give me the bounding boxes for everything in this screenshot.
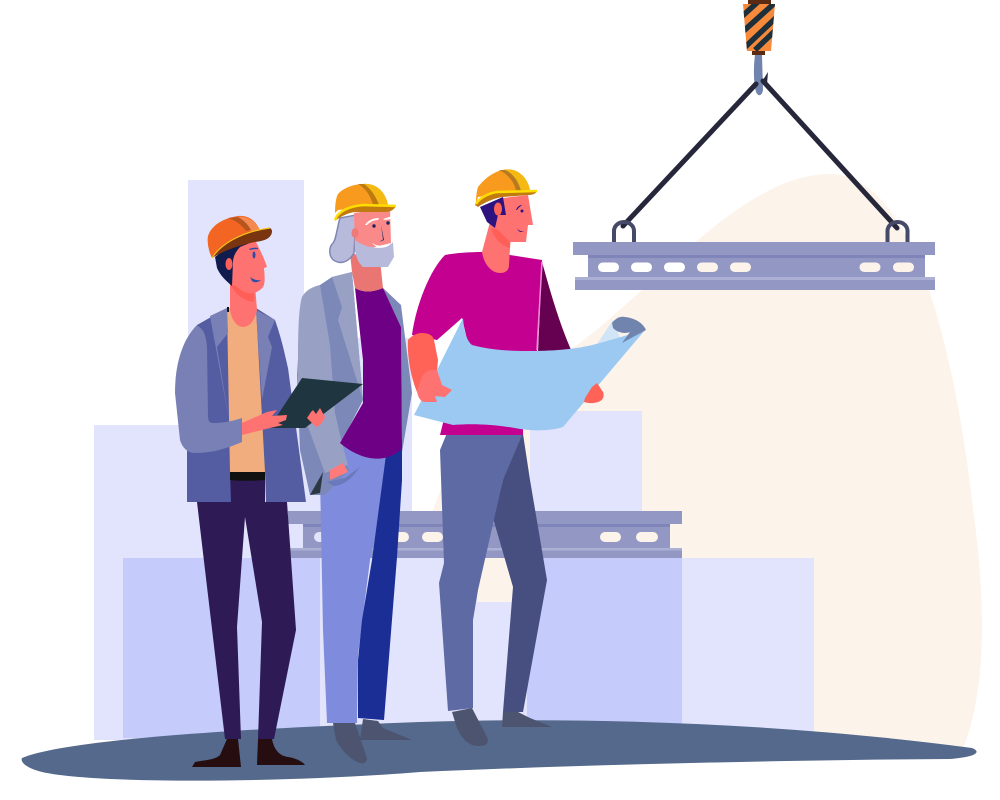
hoisted steel beam bbox=[573, 242, 935, 290]
crane hook and block bbox=[743, 0, 775, 96]
shirt bbox=[412, 252, 542, 352]
ear bbox=[226, 258, 232, 270]
hard hat bbox=[335, 184, 396, 221]
belt bbox=[230, 472, 265, 481]
background: darker building blocks bbox=[123, 558, 682, 740]
jacket bbox=[187, 308, 306, 502]
hands on clipboard bbox=[242, 408, 325, 435]
shoes bbox=[192, 739, 305, 767]
ground bbox=[22, 720, 977, 781]
pocket and hand bbox=[330, 463, 348, 480]
shirt back panel bbox=[538, 262, 572, 352]
shoes bbox=[452, 708, 552, 746]
paper curl bbox=[612, 317, 646, 343]
brows and smile bbox=[365, 216, 392, 247]
curl underside bbox=[595, 320, 622, 347]
hard hat bbox=[208, 216, 272, 258]
clipboard held by first man bbox=[242, 378, 363, 435]
beard bbox=[355, 240, 394, 267]
face bbox=[227, 240, 267, 293]
hard hat bbox=[475, 169, 537, 207]
trousers dark bbox=[358, 440, 402, 720]
face bbox=[354, 208, 391, 252]
shoes bbox=[333, 719, 412, 763]
lapel bbox=[332, 272, 363, 400]
eye, brow, mouth bbox=[249, 248, 261, 282]
background beam bbox=[288, 511, 682, 558]
ear bbox=[352, 228, 358, 238]
neck bbox=[230, 280, 257, 327]
shirt bbox=[227, 308, 265, 472]
legs bbox=[197, 470, 296, 739]
background: pale buildings bbox=[94, 180, 814, 740]
sleeve bbox=[175, 325, 242, 453]
trouser far leg bbox=[493, 434, 547, 712]
eyes and nose bbox=[372, 221, 390, 242]
face bbox=[495, 195, 533, 242]
ear bbox=[494, 202, 502, 216]
shirt lower bbox=[440, 415, 523, 435]
left hand bbox=[417, 370, 452, 402]
jacket right strip bbox=[383, 288, 412, 452]
shirt bbox=[340, 288, 402, 459]
crane slings bbox=[623, 81, 897, 228]
forearm bbox=[408, 333, 438, 392]
trousers light bbox=[320, 440, 388, 723]
eye, brow, mouth bbox=[516, 205, 524, 232]
collar bbox=[227, 307, 256, 312]
person: man with clipboard bbox=[175, 216, 306, 767]
neck bbox=[350, 253, 383, 292]
person: older man with beard bbox=[297, 184, 412, 763]
background: cream blob bbox=[411, 174, 982, 752]
lapels bbox=[210, 308, 275, 420]
right hand bbox=[584, 383, 604, 403]
hair bbox=[215, 240, 257, 286]
beam shackles bbox=[614, 222, 908, 243]
trouser near leg bbox=[439, 433, 523, 711]
jacket base bbox=[297, 272, 363, 495]
jacket sleeve bbox=[298, 285, 348, 473]
neck bbox=[482, 222, 511, 273]
back hair bbox=[330, 215, 356, 262]
hair bbox=[480, 197, 506, 228]
blueprint paper bbox=[414, 318, 645, 430]
person: man with blueprint bbox=[408, 169, 646, 746]
